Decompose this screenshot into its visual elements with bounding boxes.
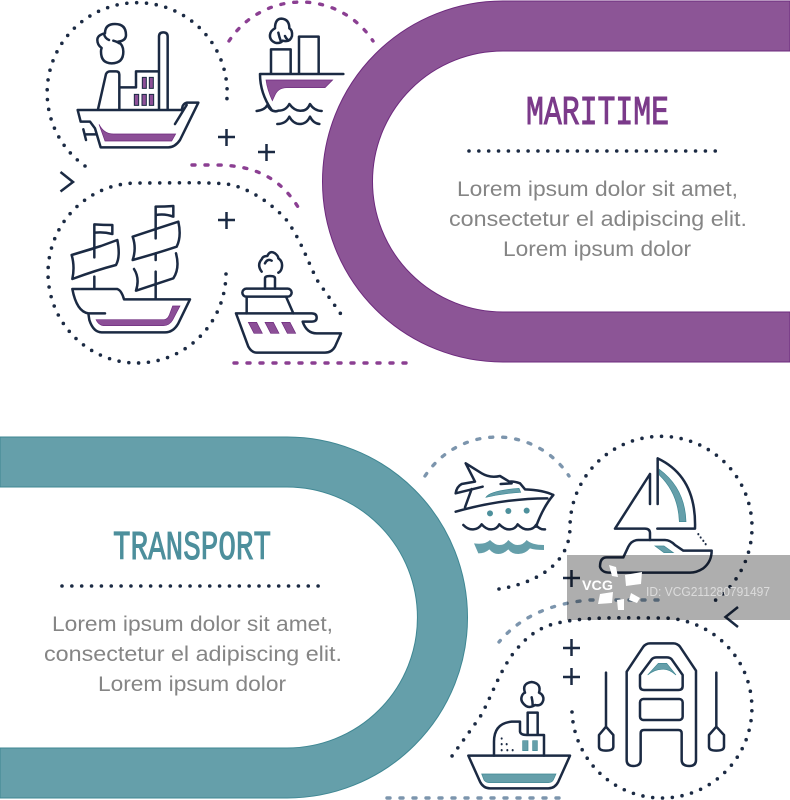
text block: maritime: consectetur el adipiscing elit.: [449, 208, 747, 231]
text block: transport: consectetur el adipiscing elit.: [44, 643, 342, 666]
icon: factory ship: [78, 24, 198, 147]
dashed line: teal bottom: [387, 796, 565, 800]
dotted divider: maritime: [469, 149, 718, 153]
watermark panel: [567, 555, 790, 620]
icon: plus signs maritime: [218, 129, 275, 229]
icon: sailboat: [600, 458, 712, 573]
icon: galleon: [72, 206, 190, 332]
text block: maritime: [449, 178, 747, 261]
icon: yacht: [456, 463, 553, 554]
dashed arc: teal top: [425, 437, 569, 476]
dotted outline: lower right circle: [452, 618, 752, 798]
dotted outline: top left circle: [47, 3, 227, 166]
icon: inflatable raft with oars: [599, 643, 724, 766]
text block: maritime: Lorem ipsum dolor: [503, 238, 691, 261]
icon: steamboat: [468, 682, 570, 788]
text block: transport: Lorem ipsum dolor: [98, 673, 286, 696]
text block: transport: Lorem ipsum dolor sit amet,: [52, 613, 333, 636]
dashed curve: teal middle: [499, 600, 658, 642]
dotted outline: lower left circle: [48, 183, 345, 363]
text block: maritime: Lorem ipsum dolor sit amet,: [457, 178, 738, 201]
dotted outline: upper right circle: [499, 436, 752, 602]
icon: chevron left: [726, 607, 738, 627]
panel: teal rounded band: [0, 437, 468, 798]
dashed arc: purple top: [229, 2, 373, 41]
panel: purple rounded band: [322, 1, 790, 362]
icon: chevron right: [60, 172, 73, 192]
heading: transport: TRANSPORT: [113, 526, 271, 572]
dashed line: purple bottom: [234, 361, 410, 365]
watermark panel: VCG: [582, 577, 613, 593]
icon: tug boat: [236, 252, 341, 353]
heading: maritime: MARITIME: [526, 91, 669, 137]
icon: plus signs transport: [563, 570, 580, 685]
watermark panel: ID: VCG211280791497: [646, 585, 770, 599]
dotted divider: transport: [62, 584, 324, 588]
dashed curve: purple middle: [192, 165, 298, 207]
text block: transport: [44, 613, 342, 696]
icon: steamship with waves: [257, 19, 343, 124]
